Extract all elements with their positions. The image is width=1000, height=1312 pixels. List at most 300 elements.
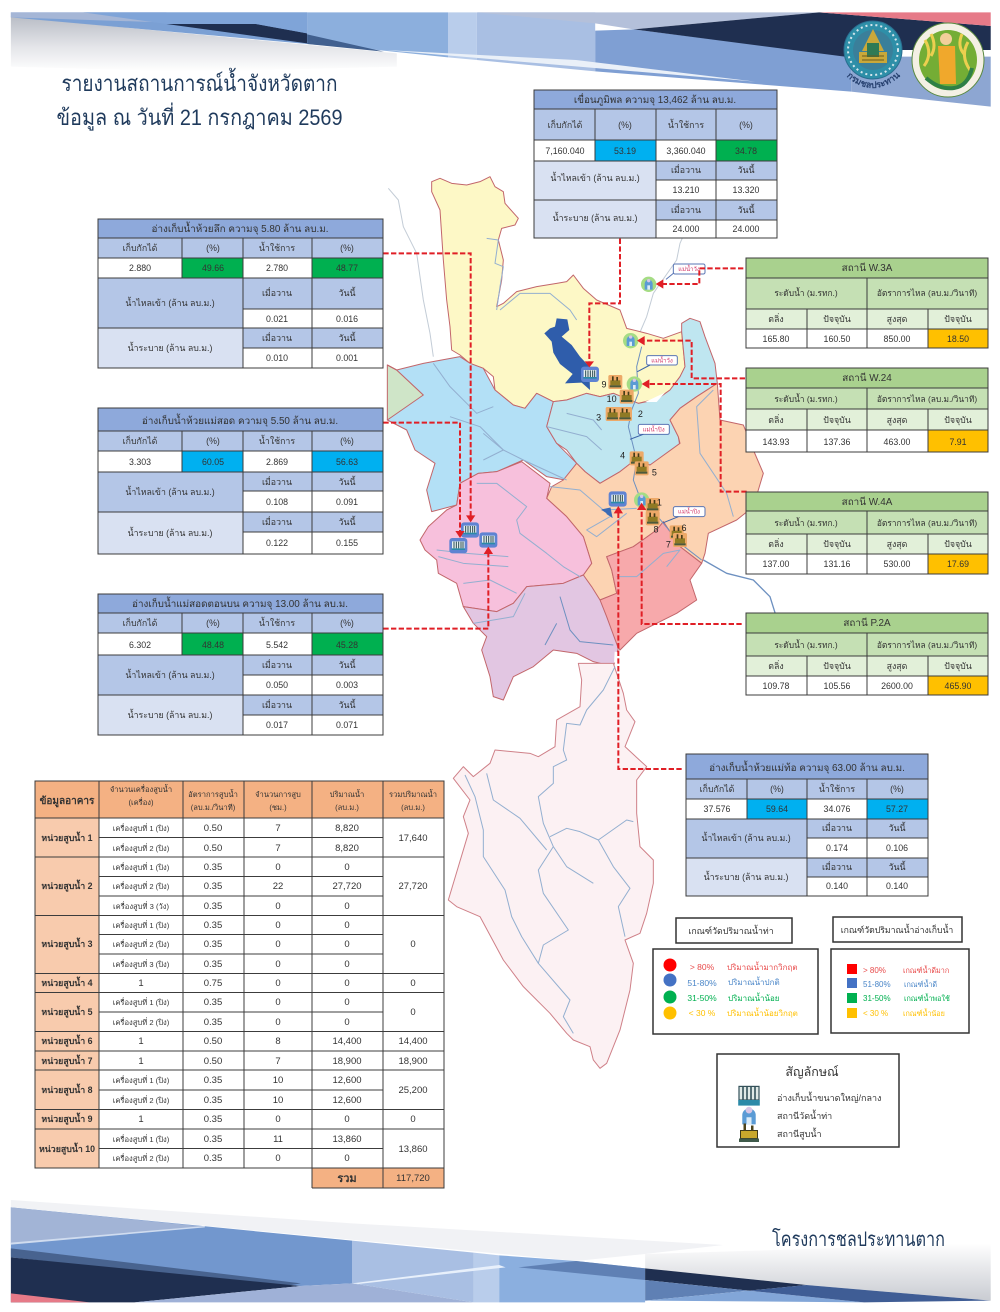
table: Huai Mae Sot reservoir: 0.108 <box>266 497 288 507</box>
table: Huai Luek reservoir: 0.010 <box>266 353 288 363</box>
table: Huai Luek reservoir: เมื่อวาน <box>262 287 292 298</box>
table: Huai Mae Tho reservoir: 0.106 <box>886 843 908 853</box>
table body rows: เครื่องสูบที่ 1 (ปิง) <box>113 997 170 1007</box>
table totals column: 117,720 <box>396 1173 430 1184</box>
table: station W.3A: อัตราการไหล (ลบ.ม./วินาที) <box>877 288 977 298</box>
river tags: แม่น้ำปิง <box>678 506 700 516</box>
table: Huai Mae Sot reservoir: 2.869 <box>266 457 288 467</box>
table totals column: 0 <box>410 1007 416 1018</box>
table: Huai Mae Tho reservoir: น้ำใช้การ <box>819 782 855 794</box>
icons: dams <box>449 367 627 553</box>
table: Bhumibol Dam: 34.78 <box>735 146 757 156</box>
table: station W.3A: ระดับน้ำ (ม.รทก.) <box>774 287 838 298</box>
table: Upper Mae Sot reservoir: เมื่อวาน <box>262 659 292 670</box>
icon: reservoir <box>738 1086 760 1106</box>
table header row: จำนวนเครื่องสูบน้ำ <box>110 784 172 794</box>
table totals column: 0 <box>410 1114 416 1125</box>
table: Bhumibol Dam: 7,160.040 <box>545 146 585 156</box>
table: Bhumibol Dam: วันนี้ <box>738 163 755 175</box>
table: Bhumibol Dam: 53.19 <box>614 146 636 156</box>
table body rows: 22 <box>273 881 283 892</box>
table: Upper Mae Sot reservoir: 0.017 <box>266 720 288 730</box>
table: Huai Mae Sot reservoir: 56.63 <box>336 457 358 467</box>
legend: reservoir criteria: > 80% <box>863 966 886 975</box>
table: Huai Mae Sot reservoir: 0.155 <box>336 538 358 548</box>
table body rows: เครื่องสูบที่ 1 (ปิง) <box>113 920 170 930</box>
table unit names: หน่วยสูบน้ำ 8 <box>41 1083 93 1096</box>
table body rows: 0 <box>344 1153 350 1164</box>
table: Huai Luek reservoir: (%) <box>206 243 220 253</box>
rivers <box>433 238 778 645</box>
table: station W.4A: ปัจจุบัน <box>944 539 972 550</box>
table: Upper Mae Sot reservoir <box>98 594 383 735</box>
table body rows: 10 <box>273 1095 283 1106</box>
table body rows: 0.35 <box>204 1095 222 1106</box>
region: north yellow <box>432 177 685 408</box>
table: station W.24: 137.36 <box>824 437 851 447</box>
table body rows: 0.35 <box>204 901 222 912</box>
legend heading: flow criteria: เกณฑ์วัดปริมาณน้ำท่า <box>688 924 774 936</box>
region: red <box>600 522 702 650</box>
table: Bhumibol Dam: เก็บกักได้ <box>548 119 583 130</box>
reservoir lake <box>544 318 590 390</box>
table: station W.24: ปัจจุบัน <box>944 415 972 426</box>
table body rows: 27,720 <box>332 881 362 892</box>
footer decorative banner <box>11 1200 991 1302</box>
table body rows <box>113 823 362 1164</box>
table: Huai Mae Tho reservoir: น้ำระบาย (ล้าน ลบ.ม.) <box>704 870 788 882</box>
table body rows: 0 <box>344 862 350 873</box>
table unit names: หน่วยสูบน้ำ 3 <box>41 937 93 950</box>
table: Huai Luek reservoir <box>98 219 383 368</box>
table: Bhumibol Dam: เมื่อวาน <box>671 164 701 175</box>
table: Upper Mae Sot reservoir: วันนี้ <box>339 658 356 670</box>
pump station numbers: 5 <box>652 467 657 477</box>
table: station P.2A: ตลิ่ง <box>768 660 784 671</box>
table body rows: 1 <box>138 978 144 989</box>
icons: water gauging stations <box>623 277 656 508</box>
table: Huai Mae Tho reservoir <box>686 754 928 896</box>
table body rows: 0 <box>344 1017 350 1028</box>
table totals column: 17,640 <box>398 833 428 844</box>
legend: reservoir criteria: เกณฑ์น้ำดีมาก <box>903 965 949 975</box>
table body rows: 0 <box>344 978 350 989</box>
table: Huai Luek reservoir: 0.016 <box>336 314 358 324</box>
table: station W.3A: สูงสุด <box>887 314 908 325</box>
table: station W.3A: 18.50 <box>947 334 969 344</box>
pump station numbers: 7 <box>666 540 671 550</box>
table: Huai Mae Sot reservoir: น้ำใช้การ <box>259 434 295 446</box>
table: station W.4A: ปัจจุบัน <box>823 539 851 550</box>
table: Upper Mae Sot reservoir: 48.48 <box>202 640 224 650</box>
table: station W.4A <box>746 492 988 574</box>
table: station P.2A: อัตราการไหล (ลบ.ม./วินาที) <box>877 640 977 650</box>
legend: flow criteria <box>653 949 818 1034</box>
table totals column: รวม <box>337 1173 357 1185</box>
table: Huai Mae Tho reservoir: 57.27 <box>886 804 908 814</box>
table: Huai Mae Sot reservoir: เก็บกักได้ <box>123 435 158 446</box>
table header row: จำนวนการสูบ <box>255 790 301 799</box>
pump station numbers <box>596 380 686 550</box>
table: station P.2A: สถานี P.2A <box>843 617 891 629</box>
legend: flow criteria: 51-80% <box>687 978 717 988</box>
table totals column: 0 <box>410 939 416 950</box>
table unit names: หน่วยสูบน้ำ 1 <box>41 831 93 844</box>
pump station numbers: 4 <box>620 450 625 460</box>
table body rows: 0.35 <box>204 939 222 950</box>
table: Huai Mae Sot reservoir: เมื่อวาน <box>262 476 292 487</box>
legend: flow criteria: < 30 % <box>689 1008 716 1018</box>
table body rows: 7 <box>275 843 281 854</box>
table unit names: หน่วยสูบน้ำ 7 <box>41 1054 93 1067</box>
table: Bhumibol Dam: วันนี้ <box>738 203 755 215</box>
region: western green sliver <box>387 365 423 420</box>
table: Huai Mae Tho reservoir: (%) <box>770 784 784 794</box>
table: Bhumibol Dam: 3,360.040 <box>666 146 706 156</box>
table: Upper Mae Sot reservoir: เก็บกักได้ <box>123 617 158 628</box>
table totals column <box>337 833 430 1185</box>
table body rows: เครื่องสูบที่ 2 (ปิง) <box>113 881 170 891</box>
table: station W.24: สถานี W.24 <box>842 372 892 384</box>
table: Huai Mae Sot reservoir: 3.303 <box>129 457 151 467</box>
table: station W.3A: สถานี W.3A <box>842 262 893 274</box>
table body rows: เครื่องสูบที่ 2 (ปิง) <box>113 939 170 949</box>
white gaps between regions <box>614 393 665 663</box>
table body rows: 10 <box>273 1075 283 1086</box>
table body rows: 0.35 <box>204 862 222 873</box>
table: Huai Luek reservoir: น้ำระบาย (ล้าน ลบ.ม.) <box>128 341 212 353</box>
pump station numbers: 6 <box>681 523 686 533</box>
table: station W.24: ระดับน้ำ (ม.รทก.) <box>774 393 838 404</box>
table: Huai Luek reservoir: น้ำไหลเข้า (ล้าน ลบ.ม.) <box>125 296 215 308</box>
table header row: (ลบ.ม.) <box>401 803 425 812</box>
table totals column: 18,900 <box>398 1056 428 1067</box>
table body rows: 0 <box>275 920 281 931</box>
table: Huai Mae Tho reservoir: วันนี้ <box>889 821 906 833</box>
table: station W.24: สูงสุด <box>887 415 908 426</box>
table body rows: 0.35 <box>204 1017 222 1028</box>
title: ข้อมูล ณ วันที่ 21 กรกฎาคม 2569 <box>56 102 342 131</box>
table body rows: 7 <box>275 823 281 834</box>
region: purple <box>463 575 618 700</box>
table body rows: เครื่องสูบที่ 1 (ปิง) <box>113 1134 170 1144</box>
region: pink <box>420 462 592 612</box>
legend: symbols: อ่างเก็บน้ำขนาดใหญ่/กลาง <box>777 1091 881 1103</box>
table: Upper Mae Sot reservoir: อ่างเก็บน้ำแม่สอดตอนบน ความจุ 13.00 ล้าน ลบ.ม. <box>132 596 348 610</box>
table body rows: 12,600 <box>332 1075 362 1086</box>
table: station W.24: 7.91 <box>949 437 967 447</box>
table: Huai Mae Sot reservoir: เมื่อวาน <box>262 516 292 527</box>
table body rows: 12,600 <box>332 1095 362 1106</box>
legend: symbols: สัญลักษณ์ <box>785 1065 839 1079</box>
footer label: โครงการชลประทานตาก <box>772 1228 945 1251</box>
table: Huai Mae Sot reservoir: วันนี้ <box>339 515 356 527</box>
pump station numbers: 3 <box>596 413 601 423</box>
table unit names: หน่วยสูบน้ำ 6 <box>41 1034 93 1047</box>
region: sky blue <box>387 357 577 512</box>
table: station W.24: 143.93 <box>763 437 790 447</box>
table: station W.4A: 137.00 <box>763 559 790 569</box>
table body rows: 0 <box>275 939 281 950</box>
table: Huai Luek reservoir: 2.880 <box>129 263 151 273</box>
table totals column: 25,200 <box>398 1085 428 1096</box>
table body rows: 0.35 <box>204 959 222 970</box>
region: pale blue <box>547 318 717 483</box>
legend heading: reservoir criteria: เกณฑ์วัดปริมาณน้ำอ่างเก็บน้ำ <box>841 923 953 935</box>
table: Huai Mae Sot reservoir: (%) <box>206 436 220 446</box>
table unit names: หน่วยสูบน้ำ 5 <box>41 1005 93 1018</box>
table body rows: 0.50 <box>204 843 222 854</box>
table body rows: 0 <box>344 901 350 912</box>
table: Upper Mae Sot reservoir: เมื่อวาน <box>262 699 292 710</box>
table unit names: หน่วยสูบน้ำ 10 <box>39 1142 95 1155</box>
table: Huai Mae Tho reservoir: (%) <box>890 784 904 794</box>
table: Upper Mae Sot reservoir: 0.071 <box>336 720 358 730</box>
table: Huai Mae Tho reservoir: 34.076 <box>824 804 851 814</box>
table body rows: 0.75 <box>204 978 222 989</box>
table body rows: เครื่องสูบที่ 3 (วัง) <box>113 901 169 911</box>
legend: flow criteria: 31-50% <box>687 993 717 1003</box>
table: Bhumibol Dam: น้ำใช้การ <box>668 118 704 130</box>
arrows: dashed connectors from tables to map <box>383 239 747 769</box>
table: Huai Luek reservoir: วันนี้ <box>339 286 356 298</box>
table body rows: 0 <box>344 997 350 1008</box>
table header row: (ลบ.ม./วินาที) <box>191 803 236 812</box>
table: Huai Mae Sot reservoir: (%) <box>340 436 354 446</box>
table: station W.3A <box>746 258 988 348</box>
table: Huai Luek reservoir: (%) <box>340 243 354 253</box>
icon: gauging station <box>742 1107 756 1124</box>
river tags: แม่น้ำวัง <box>651 354 673 364</box>
pump station numbers: 10 <box>607 394 617 404</box>
table: Huai Mae Sot reservoir: วันนี้ <box>339 475 356 487</box>
small lake Mae Tho <box>602 508 612 517</box>
legend: symbols: สถานีสูบน้ำ <box>777 1127 822 1140</box>
table: station P.2A: ปัจจุบัน <box>944 661 972 672</box>
table header row: (เครื่อง) <box>128 797 154 807</box>
table: Huai Mae Tho reservoir: เก็บกักได้ <box>700 783 735 794</box>
table body rows: 0 <box>275 978 281 989</box>
table: station W.4A: 17.69 <box>947 559 969 569</box>
table body rows: 0 <box>275 997 281 1008</box>
table: Huai Mae Sot reservoir: 0.122 <box>266 538 288 548</box>
table: Bhumibol Dam: เมื่อวาน <box>671 204 701 215</box>
table unit names: หน่วยสูบน้ำ 2 <box>41 879 93 892</box>
legend: reservoir criteria: 31-50% <box>863 994 891 1003</box>
pump station numbers: 8 <box>653 525 658 535</box>
table header row: อัตราการสูบน้ำ <box>188 789 238 799</box>
table: Upper Mae Sot reservoir: น้ำใช้การ <box>259 616 295 628</box>
table: Huai Luek reservoir: วันนี้ <box>339 331 356 343</box>
table body rows: เครื่องสูบที่ 2 (ปิง) <box>113 843 170 853</box>
table: Bhumibol Dam: 24.000 <box>733 224 760 234</box>
river tags: แม่น้ำวัง <box>678 263 700 273</box>
river tags <box>630 263 705 523</box>
table: Bhumibol Dam: เขื่อนภูมิพล ความจุ 13,462 ล้าน ลบ.ม. <box>574 93 736 106</box>
legend: reservoir criteria: เกณฑ์น้ำดี <box>904 979 937 989</box>
table: Upper Mae Sot reservoir: น้ำไหลเข้า (ล้าน ลบ.ม.) <box>125 668 215 680</box>
table body rows: 14,400 <box>332 1036 362 1047</box>
table: Huai Luek reservoir: เมื่อวาน <box>262 332 292 343</box>
table: station P.2A: 105.56 <box>824 681 851 691</box>
table totals column: 27,720 <box>398 881 428 892</box>
legend: symbols: สถานีวัดน้ำท่า <box>777 1109 832 1121</box>
table body rows: 8,820 <box>335 823 359 834</box>
table body rows: 0.35 <box>204 1075 222 1086</box>
table: Huai Mae Sot reservoir <box>98 408 383 554</box>
table body rows: 1 <box>138 1114 144 1125</box>
title: รายงานสถานการณ์น้ำจังหวัดตาก <box>62 68 338 96</box>
table: pumping stations <box>35 781 444 1188</box>
logo: Royal Irrigation Department: กรมชลประทาน <box>846 72 900 88</box>
pump station numbers: 1 <box>657 498 662 508</box>
table: station W.3A: ตลิ่ง <box>768 313 784 324</box>
table: Bhumibol Dam: น้ำไหลเข้า (ล้าน ลบ.ม.) <box>550 171 640 183</box>
table body rows: 0.50 <box>204 823 222 834</box>
table body rows: 18,900 <box>332 1056 362 1067</box>
table body rows: 0 <box>344 959 350 970</box>
table body rows: 0.35 <box>204 881 222 892</box>
table: station W.4A: 131.16 <box>824 559 851 569</box>
table: Upper Mae Sot reservoir: วันนี้ <box>339 698 356 710</box>
legend: flow criteria: ปริมาณน้ำน้อยวิกฤต <box>727 1007 798 1018</box>
table: station W.3A: 850.00 <box>884 334 911 344</box>
outer river lines beyond the border <box>388 160 713 357</box>
table: station W.24: ตลิ่ง <box>768 414 784 425</box>
map of Tak province <box>383 160 778 1068</box>
table body rows: 8 <box>275 1036 281 1047</box>
table: Huai Mae Sot reservoir: น้ำไหลเข้า (ล้าน ลบ.ม.) <box>125 485 215 497</box>
table: station W.4A: สูงสุด <box>887 539 908 550</box>
icon: pump station <box>739 1124 759 1142</box>
table body rows: 0 <box>275 1153 281 1164</box>
table: Huai Mae Tho reservoir: 0.140 <box>826 881 848 891</box>
legend: reservoir criteria: เกณฑ์น้ำน้อย <box>903 1008 945 1018</box>
table header row <box>40 784 437 812</box>
table: station W.3A: 165.80 <box>763 334 790 344</box>
table body rows: 0.50 <box>204 1036 222 1047</box>
table body rows: 0 <box>344 920 350 931</box>
legend: reservoir criteria: < 30 % <box>863 1009 888 1018</box>
table body rows: 1 <box>138 1056 144 1067</box>
table: station W.24: ปัจจุบัน <box>823 415 851 426</box>
table: Huai Luek reservoir: 0.001 <box>336 353 358 363</box>
table: station W.4A: ระดับน้ำ (ม.รทก.) <box>774 517 838 528</box>
table body rows: เครื่องสูบที่ 1 (ปิง) <box>113 823 170 833</box>
header decorative banner <box>11 12 991 107</box>
table body rows: 8,820 <box>335 843 359 854</box>
table unit names: หน่วยสูบน้ำ 4 <box>41 976 93 989</box>
table body rows: เครื่องสูบที่ 2 (ปิง) <box>113 1153 170 1163</box>
legend: flow criteria: ปริมาณน้ำน้อย <box>728 992 779 1003</box>
table: Bhumibol Dam: 13.320 <box>733 185 760 195</box>
legend: reservoir criteria <box>831 949 969 1033</box>
river tags: แม่น้ำปิง <box>643 423 665 433</box>
table: Huai Mae Sot reservoir: 60.05 <box>202 457 224 467</box>
table: Upper Mae Sot reservoir: 45.28 <box>336 640 358 650</box>
table: Upper Mae Sot reservoir: 0.050 <box>266 680 288 690</box>
table totals column: 14,400 <box>398 1036 428 1047</box>
table: station P.2A: สูงสุด <box>887 661 908 672</box>
table: Huai Mae Tho reservoir: น้ำไหลเข้า (ล้าน ลบ.ม.) <box>701 831 791 843</box>
table: station W.4A: 530.00 <box>884 559 911 569</box>
table: Huai Luek reservoir: เก็บกักได้ <box>123 242 158 253</box>
legend: flow criteria: > 80% <box>690 962 715 972</box>
table: Bhumibol Dam: (%) <box>739 120 753 130</box>
legend: flow criteria: ปริมาณน้ำปกติ <box>728 976 780 987</box>
legend heading: flow criteria <box>676 918 792 943</box>
table totals column: 0 <box>410 978 416 989</box>
table header row: (ชม.) <box>269 803 287 812</box>
table body rows: เครื่องสูบที่ 1 (ปิง) <box>113 1075 170 1085</box>
table: station W.24: 463.00 <box>884 437 911 447</box>
table: Upper Mae Sot reservoir: 6.302 <box>129 640 151 650</box>
table: Huai Mae Tho reservoir: เมื่อวาน <box>822 861 852 872</box>
table: station P.2A: 2600.00 <box>881 681 913 691</box>
region: peach <box>547 383 763 600</box>
table body rows: 0 <box>275 959 281 970</box>
table body rows: 0.50 <box>204 1056 222 1067</box>
table: Upper Mae Sot reservoir: (%) <box>340 618 354 628</box>
table header row: รวมปริมาณน้ำ <box>389 789 437 799</box>
table header row: ข้อมูลอาคาร <box>40 795 95 808</box>
table body rows: เครื่องสูบที่ 3 (ปิง) <box>113 959 170 969</box>
table: station W.4A: อัตราการไหล (ลบ.ม./วินาที) <box>877 518 977 528</box>
table: station W.3A: ปัจจุบัน <box>944 314 972 325</box>
table: station W.4A: ตลิ่ง <box>768 538 784 549</box>
table body rows: 0 <box>344 939 350 950</box>
table body rows: 1 <box>138 1036 144 1047</box>
legend: symbols <box>717 1054 899 1147</box>
legend: reservoir criteria: 51-80% <box>863 980 891 989</box>
table: Bhumibol Dam: 24.000 <box>673 224 700 234</box>
table: Huai Mae Tho reservoir: วันนี้ <box>889 860 906 872</box>
table body rows: 0.35 <box>204 1134 222 1145</box>
table header row: (ลบ.ม.) <box>335 803 359 812</box>
pump station numbers: 9 <box>601 380 606 390</box>
table: station W.24 <box>746 368 988 452</box>
table: Huai Mae Tho reservoir: อ่างเก็บน้ำห้วยแม่ท้อ ความจุ 63.00 ล้าน ลบ.ม. <box>709 760 905 774</box>
table: station W.4A: สถานี W.4A <box>842 496 893 508</box>
table body rows: 11 <box>273 1134 283 1145</box>
table unit names: หน่วยสูบน้ำ 9 <box>41 1112 93 1125</box>
table: Huai Mae Sot reservoir: 0.091 <box>336 497 358 507</box>
table: Huai Mae Tho reservoir: เมื่อวาน <box>822 822 852 833</box>
table body rows: 0 <box>344 1114 350 1125</box>
table: Huai Luek reservoir: อ่างเก็บน้ำห้วยลึก ความจุ 5.80 ล้าน ลบ.ม. <box>152 221 328 235</box>
logo: Royal Irrigation Department <box>844 20 902 88</box>
table: Bhumibol Dam: 13.210 <box>673 185 700 195</box>
table: station P.2A: ระดับน้ำ (ม.รทก.) <box>774 639 838 650</box>
table body rows: 13,860 <box>332 1134 362 1145</box>
pump station numbers: 2 <box>638 409 643 419</box>
legend: reservoir criteria: เกณฑ์น้ำพอใช้ <box>904 993 950 1003</box>
table: station W.24: อัตราการไหล (ลบ.ม./วินาที) <box>877 394 977 404</box>
table body rows: เครื่องสูบที่ 1 (ปิง) <box>113 862 170 872</box>
table body rows: 0.35 <box>204 920 222 931</box>
table body rows: เครื่องสูบที่ 2 (ปิง) <box>113 1095 170 1105</box>
table: Huai Mae Tho reservoir: 59.64 <box>766 804 788 814</box>
table: Huai Mae Tho reservoir: 0.174 <box>826 843 848 853</box>
table: station P.2A: 465.90 <box>945 681 972 691</box>
table: Huai Luek reservoir: 0.021 <box>266 314 288 324</box>
legend: flow criteria: ปริมาณน้ำมากวิกฤต <box>727 961 798 972</box>
table: Huai Luek reservoir: 49.66 <box>202 263 224 273</box>
table totals column: 13,860 <box>398 1144 428 1155</box>
table: Huai Luek reservoir: 48.77 <box>336 263 358 273</box>
table body rows: 0 <box>275 901 281 912</box>
table: Huai Mae Sot reservoir: อ่างเก็บน้ำห้วยแม่สอด ความจุ 5.50 ล้าน ลบ.ม. <box>142 413 338 427</box>
